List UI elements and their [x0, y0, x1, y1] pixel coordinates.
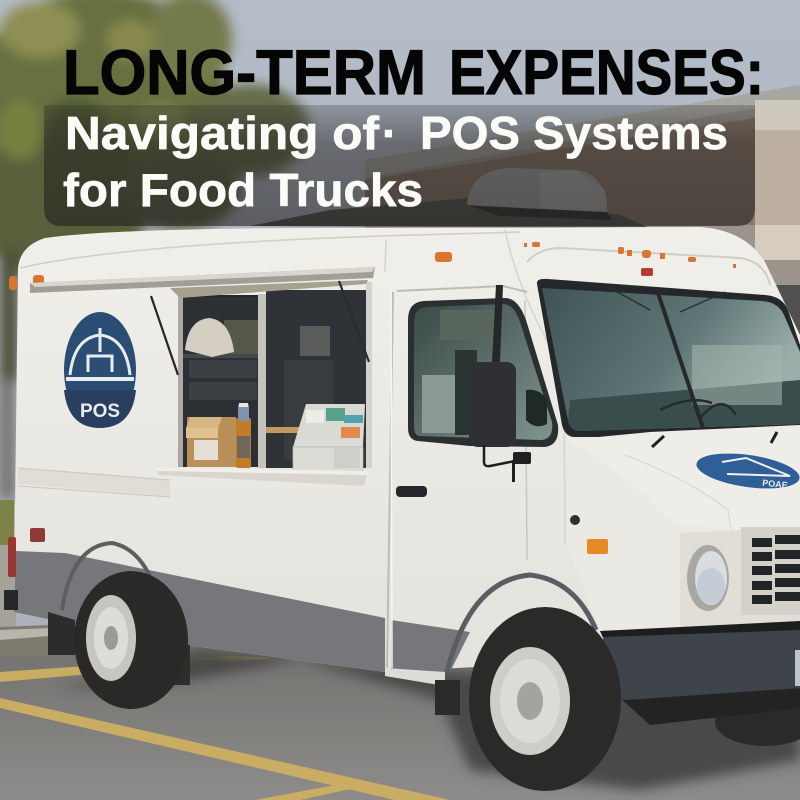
awning — [30, 267, 375, 293]
truck: POS logo on side: POS — [80, 401, 120, 422]
truck: front wheel — [435, 575, 621, 791]
ground: parking lines — [0, 656, 450, 800]
ground: grass and curb — [0, 500, 50, 657]
truck: windshield — [537, 279, 800, 437]
counter shelf — [266, 427, 300, 433]
truck: body — [14, 227, 800, 672]
truck: rear bumper — [4, 528, 75, 655]
POS terminal — [293, 404, 365, 471]
truck: lower grey band — [14, 551, 470, 672]
bottle — [236, 403, 251, 468]
truck: grille — [741, 527, 800, 615]
title: line 1: EXPENSES: — [449, 38, 764, 108]
truck: hood — [567, 425, 800, 632]
truck: rear wheel — [62, 543, 190, 709]
background: tree — [0, 0, 310, 500]
truck: door sill — [385, 668, 445, 686]
wipers — [652, 436, 664, 447]
truck: front bumper — [600, 621, 800, 725]
title panel — [44, 105, 755, 226]
truck: POS logo on side — [64, 312, 136, 428]
truck: mirror — [469, 362, 531, 482]
truck: headlight — [687, 545, 729, 611]
background: building — [365, 85, 800, 335]
title: line 3: for Food Trucks — [63, 164, 423, 216]
truck: orange marker lights — [9, 242, 736, 290]
truck: far front wheel — [715, 698, 800, 746]
title: line 2: Navigating of — [65, 107, 380, 159]
door pillar — [492, 285, 503, 362]
cardboard box — [186, 417, 236, 467]
truck shadow — [60, 650, 800, 790]
door handle — [396, 486, 427, 497]
truck: roof air conditioner — [250, 168, 650, 228]
truck: serving window — [30, 267, 375, 486]
awning struts — [151, 296, 178, 375]
ground: asphalt — [0, 640, 800, 800]
door window — [408, 298, 558, 447]
title: line 2: · — [382, 107, 397, 159]
title: line 1: LONG-TERM — [63, 38, 426, 108]
truck: hood logo: POAE — [762, 478, 788, 490]
window centre post — [258, 294, 266, 468]
truck: side door — [387, 285, 558, 668]
white fan ornament — [185, 318, 234, 357]
truck: hood logo — [694, 448, 800, 494]
title: line 2: POS Systems — [420, 107, 728, 159]
window sill — [158, 467, 368, 486]
truck: side marker and bolt — [570, 515, 608, 554]
